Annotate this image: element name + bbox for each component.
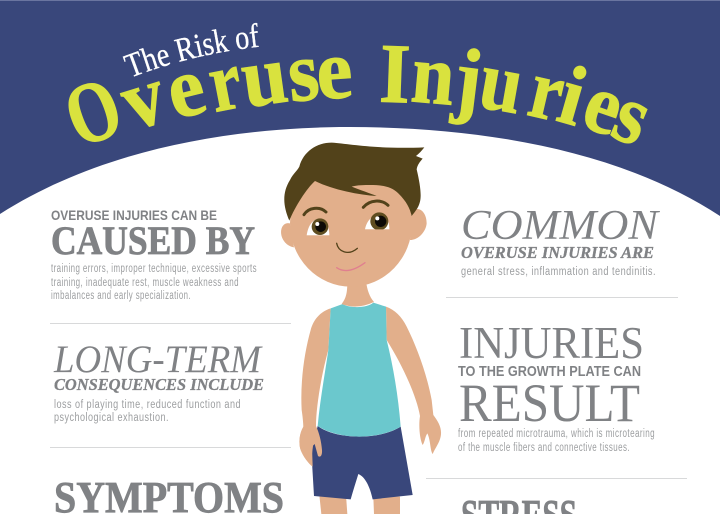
title line: Overuse Injuries: n xyxy=(408,27,459,124)
title line: Overuse Injuries xyxy=(52,21,666,166)
title line: Overuse Injuries: e xyxy=(313,21,355,118)
title line: Overuse Injuries: j xyxy=(448,30,488,127)
shorts xyxy=(312,426,413,499)
left eye xyxy=(306,218,330,239)
panel: long-term consequences xyxy=(53,338,264,424)
kicker: OVERUSE INJURIES CAN BE xyxy=(51,207,217,223)
heading: COMMON xyxy=(461,203,660,249)
right eye xyxy=(364,212,391,234)
face xyxy=(290,160,412,287)
heading top: INJURIES xyxy=(459,318,644,368)
ears xyxy=(281,209,427,247)
title line: Overuse Injuries: r xyxy=(200,32,249,130)
title line: Overuse Injuries: e xyxy=(572,54,636,154)
mouth xyxy=(337,263,365,271)
title line: Overuse Injuries: u xyxy=(473,33,530,132)
nose xyxy=(337,243,357,252)
legs xyxy=(319,495,400,514)
panel: growth plate injuries xyxy=(458,318,655,454)
heading bottom: RESULT xyxy=(459,373,640,433)
description: loss of playing time, reduced function and xyxy=(54,399,241,411)
right arm xyxy=(386,307,441,454)
title line: Overuse Injuries: u xyxy=(235,26,293,125)
panel: caused by xyxy=(51,207,257,302)
title line: Overuse Injuries: O xyxy=(52,57,134,166)
title xyxy=(52,21,666,166)
neck xyxy=(342,282,374,307)
left arm xyxy=(299,308,331,467)
tank top xyxy=(318,303,401,437)
hand xyxy=(299,426,322,467)
description: psychological exhaustion. xyxy=(54,412,169,424)
subheading: CONSEQUENCES INCLUDE xyxy=(54,375,264,394)
head xyxy=(281,143,427,307)
kicker: TO THE GROWTH PLATE CAN xyxy=(458,363,641,380)
description xyxy=(458,428,655,454)
hair xyxy=(284,143,424,221)
body xyxy=(299,303,441,514)
description: training, inadequate rest, muscle weakness and xyxy=(51,277,239,289)
title line: Overuse Injuries: v xyxy=(110,46,176,149)
description: of the muscle fibers and connective tissues. xyxy=(458,442,630,454)
heading: LONG-TERM xyxy=(53,338,263,381)
description: imbalances and early specialization. xyxy=(51,290,191,302)
description xyxy=(51,263,257,302)
heading: CAUSED BY xyxy=(51,218,255,263)
panel: common injuries xyxy=(461,203,660,278)
title line: Overuse Injuries: I xyxy=(378,26,412,121)
description: general stress, inflammation and tendinitis. xyxy=(461,266,656,278)
subheading: OVERUSE INJURIES ARE xyxy=(461,243,654,262)
title line: Overuse Injuries: s xyxy=(283,23,323,120)
header banner xyxy=(0,0,720,216)
title line: Overuse Injuries: i xyxy=(549,47,597,144)
title line: Overuse Injuries: s xyxy=(601,65,666,164)
description: training errors, improper technique, excessive sports xyxy=(51,263,257,275)
title line: The Risk of: The Risk of xyxy=(122,22,259,77)
title line: Overuse Injuries: r xyxy=(521,42,573,141)
title line: Overuse Injuries: e xyxy=(156,37,214,137)
eyebrows xyxy=(304,201,388,215)
description xyxy=(54,399,241,424)
illustration: boy xyxy=(281,143,441,514)
